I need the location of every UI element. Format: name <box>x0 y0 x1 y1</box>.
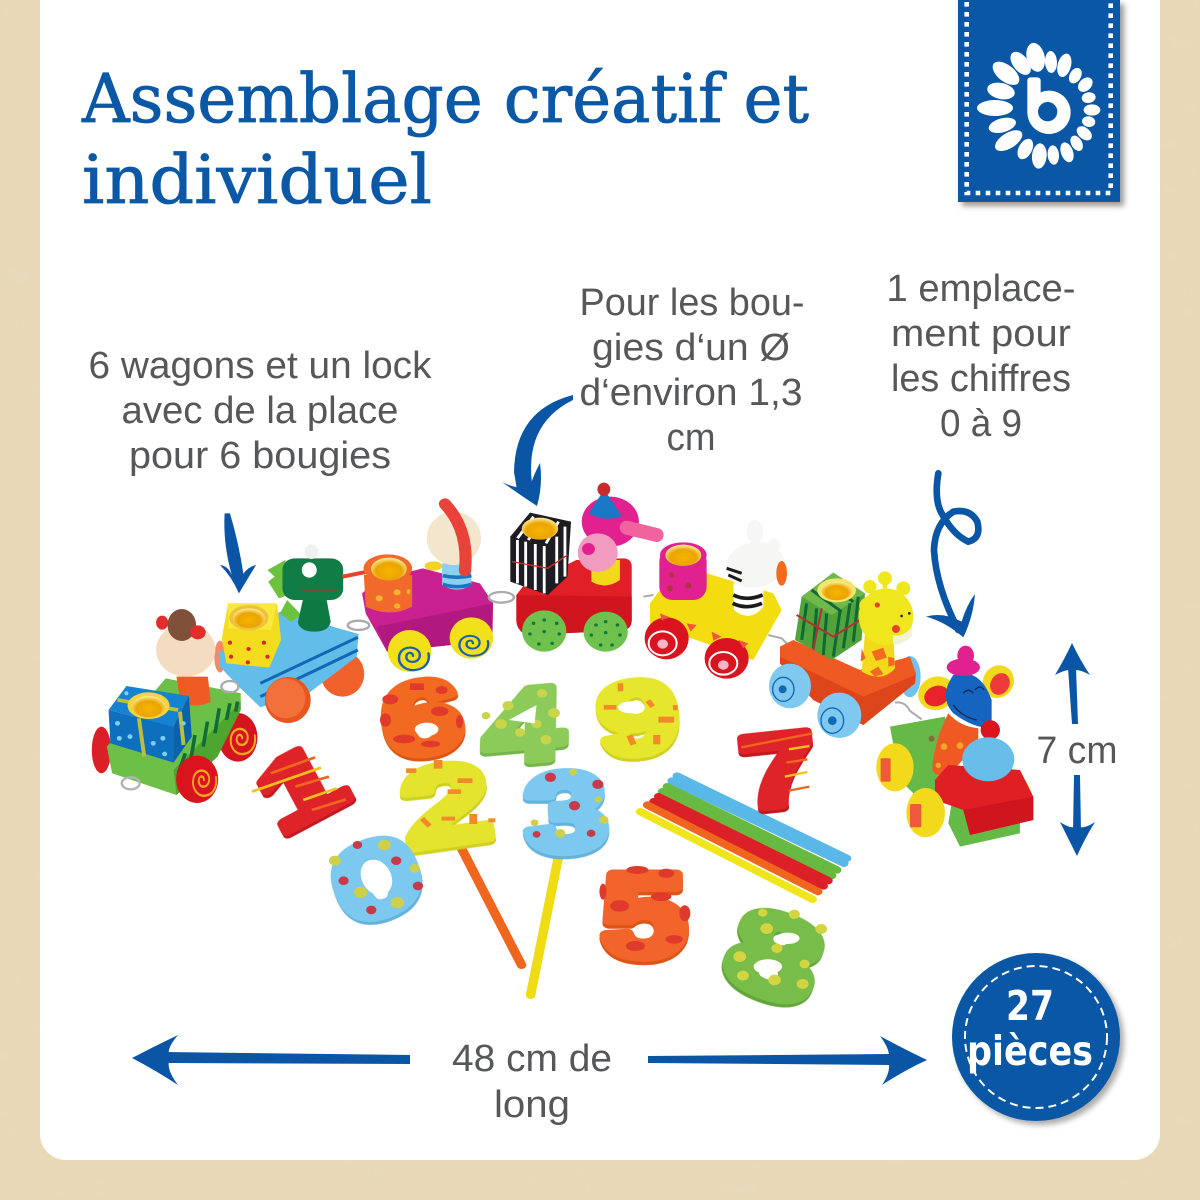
locomotive: mouse <box>876 646 1033 847</box>
car: light blue with dino <box>214 544 367 723</box>
title <box>81 60 809 219</box>
arrow: height up <box>1055 643 1090 724</box>
text: candle diameter <box>580 282 804 459</box>
text: wagons: 6 wagons et un lock <box>88 345 433 387</box>
elephant trunk <box>627 528 657 535</box>
text: wagons: pour 6 bougies <box>129 435 391 477</box>
car: yellow with zebra <box>643 520 788 679</box>
number 4: 4 <box>483 664 565 786</box>
text: wagons: avec de la place <box>122 390 398 432</box>
text: candle diameter: cm <box>666 417 716 459</box>
badge: 27 pieces <box>952 953 1124 1125</box>
number 8: 8 <box>710 880 839 1031</box>
arrow: to wagons <box>220 513 256 593</box>
text: length: long <box>494 1084 570 1126</box>
number 6: 6 <box>374 656 470 780</box>
badge: 27 pieces: 27 <box>1006 982 1054 1030</box>
number 3: 3 <box>522 748 610 876</box>
title: individuel <box>82 141 432 219</box>
badge: 27 pieces: pièces <box>967 1027 1093 1075</box>
car: orange with gift and giraffe <box>769 571 922 738</box>
title: Assemblage créatif et <box>81 60 809 138</box>
number 0: 0 <box>315 810 438 949</box>
text: length: 48 cm de <box>452 1038 612 1080</box>
arrow: to candle holder <box>502 395 573 506</box>
car: green with gift <box>92 609 369 803</box>
car: magenta with monkey <box>362 504 514 672</box>
logo tag <box>958 0 1124 206</box>
arrow: curly to number slot <box>926 473 978 637</box>
text: candle diameter: gies d‘un Ø <box>592 327 790 369</box>
text: candle diameter: d‘environ 1,3 <box>580 372 802 414</box>
text: number slot: 1 emplace- <box>886 268 1076 310</box>
train illustration, left cars <box>92 483 639 803</box>
car: red with elephant <box>510 483 639 652</box>
text: number slot: ment pour <box>891 313 1071 355</box>
train illustration, right cars <box>627 520 1033 847</box>
number 1: 1 <box>239 720 362 854</box>
text: wagons <box>88 345 433 477</box>
text: candle diameter: Pour les bou- <box>580 282 804 324</box>
arrow: length right <box>648 1036 927 1085</box>
text: number slot: 0 à 9 <box>940 403 1022 445</box>
number 9: 9 <box>593 658 683 778</box>
text: height: 7 cm <box>1036 730 1118 772</box>
number 7: 7 <box>735 710 821 831</box>
arrow: length left <box>132 1035 410 1085</box>
sticks <box>456 776 847 995</box>
number 5: 5 <box>601 850 687 980</box>
text: length <box>452 1038 612 1126</box>
number 2: 2 <box>394 738 498 872</box>
text: number slot: les chiffres <box>891 358 1071 400</box>
arrow: height down <box>1060 775 1095 856</box>
text: number slot <box>886 268 1076 445</box>
icon: flower b mark <box>977 41 1100 169</box>
